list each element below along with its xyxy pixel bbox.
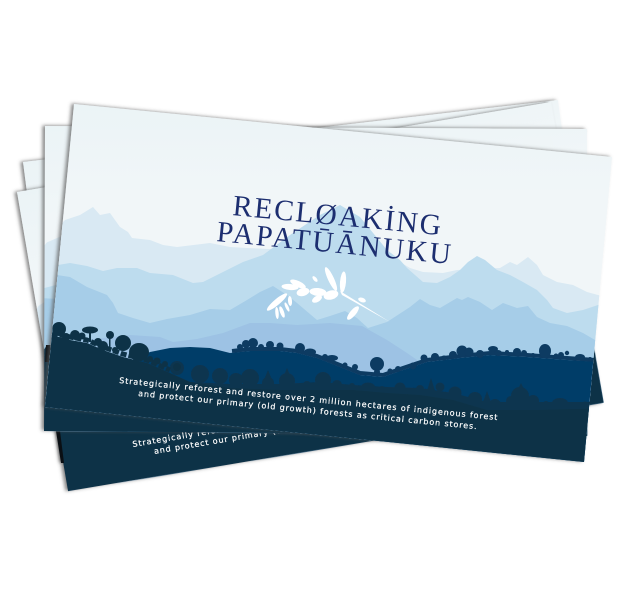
foreground trees on left ridge bbox=[52, 322, 181, 371]
title bbox=[217, 196, 452, 264]
mountain layer: light blue with central peak bbox=[44, 205, 598, 460]
sky bbox=[40, 90, 620, 300]
leaflet text on second card: and protect our primary (old growth) forests as critical carbon stores. bbox=[153, 390, 490, 456]
mountain layer: mid blue bbox=[44, 275, 596, 440]
trees on navy hill bbox=[232, 338, 595, 375]
leaflet: front card bbox=[40, 90, 620, 480]
title: RECLØAKİNG bbox=[231, 190, 442, 242]
forest silhouette in dark teal mid-ground bbox=[170, 361, 590, 415]
mountain layer: palest ridge bbox=[40, 207, 620, 480]
leaflet: third card, nearly upright bbox=[8, 58, 626, 508]
title: PAPATŪĀNUKU bbox=[215, 216, 452, 271]
icon: white olive branch bbox=[265, 266, 390, 322]
hill layer: deep navy bbox=[40, 347, 620, 480]
infographic: stack of four leaflets bbox=[12, 98, 612, 493]
leaflet text on front card: and protect our primary (old growth) forests as critical carbon stores. bbox=[138, 389, 477, 431]
dark shadow sliver at lower left of stack bbox=[56, 431, 64, 463]
foreground band: dark teal hillside bbox=[40, 335, 620, 480]
dark shadow sliver at left of top card bbox=[45, 345, 52, 362]
leaflet text on second card: Strategically reforest and restore over 2 million hectares of indigenous forest bbox=[132, 377, 508, 449]
mountain layer: periwinkle foreground bbox=[45, 323, 592, 450]
leaflet text on front card: Strategically reforest and restore over 2 million hectares of indigenous forest bbox=[119, 376, 498, 422]
